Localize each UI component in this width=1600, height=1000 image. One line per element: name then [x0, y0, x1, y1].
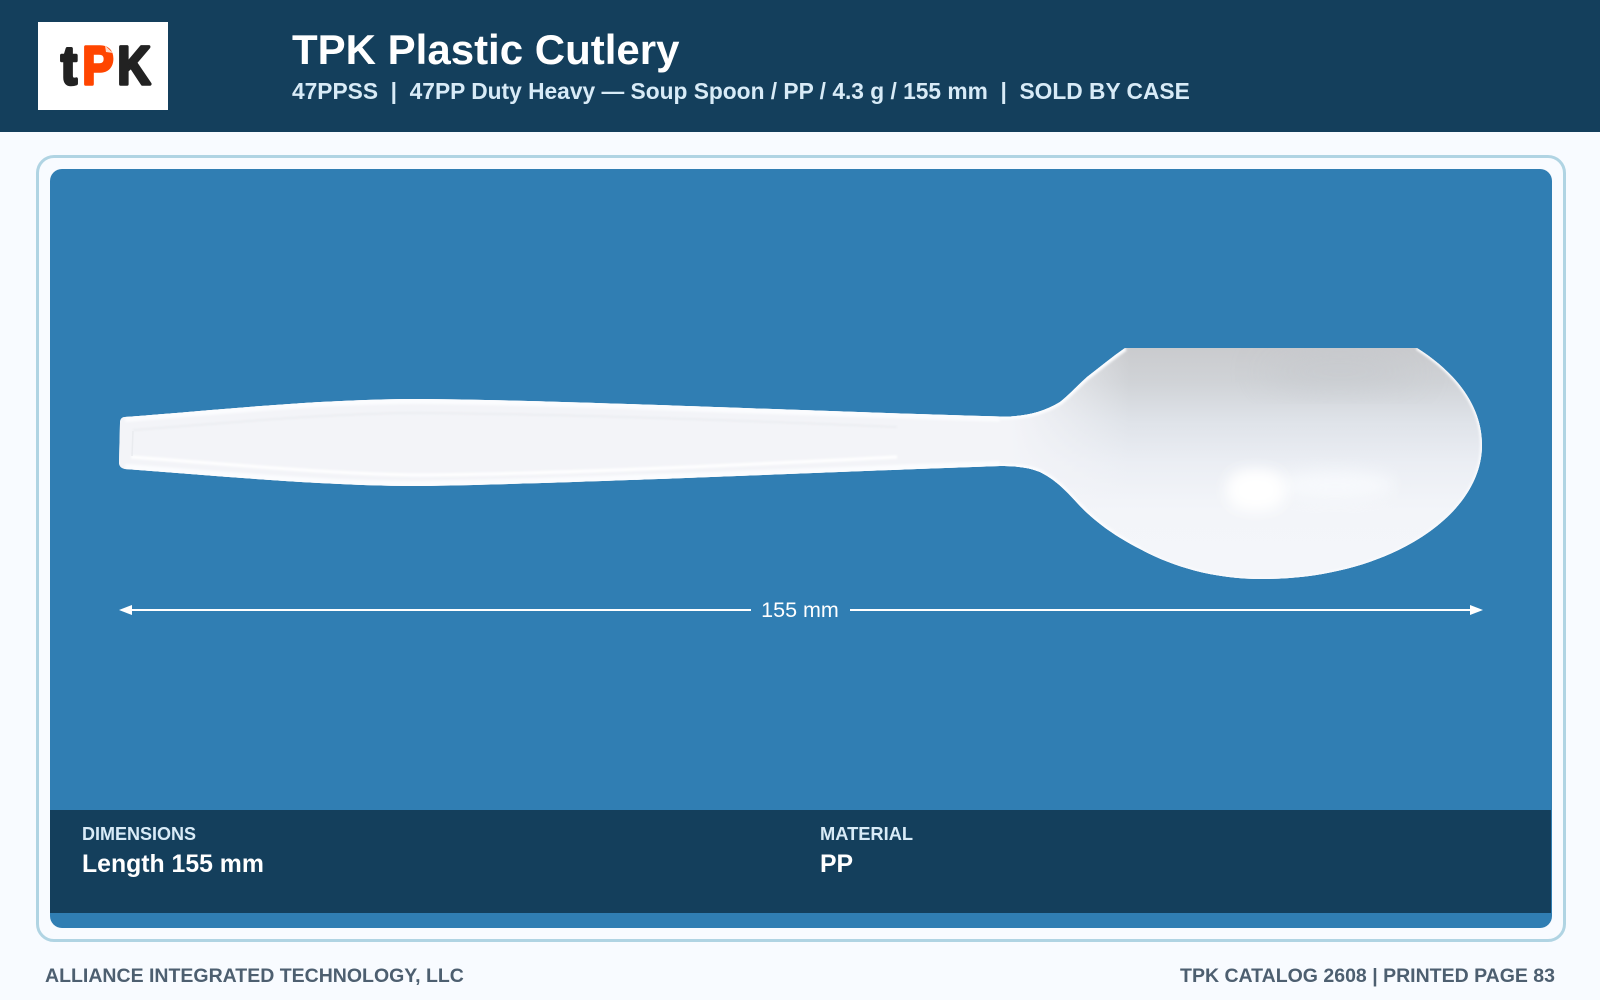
title: TPK Plastic Cutlery	[292, 26, 679, 73]
footer: company: ALLIANCE INTEGRATED TECHNOLOGY, LLC	[45, 965, 464, 987]
panel: product frame	[36, 155, 1566, 942]
dimension arrow: 155 mm: 155 mm	[761, 598, 839, 622]
logo: tPK: K	[118, 36, 150, 96]
label: dimensions: DIMENSIONS	[82, 824, 196, 844]
panel: product image area	[50, 169, 1552, 928]
logo: tPK: t	[61, 36, 77, 96]
label: material: MATERIAL	[820, 823, 913, 844]
logo: tPK: P	[82, 36, 114, 96]
logo: tPK	[38, 22, 168, 110]
spoon illustration	[119, 348, 1483, 617]
dimension arrow: 155 mm	[119, 598, 1483, 622]
header bar	[0, 0, 1600, 132]
footer: catalog: TPK CATALOG 2608 | PRINTED PAGE 83	[1180, 965, 1555, 987]
spec band	[50, 810, 1551, 913]
value: PP: PP	[820, 851, 853, 878]
spec: material	[820, 823, 913, 878]
subtitle: 47PPSS | 47PP Duty Heavy — Soup Spoon / PP / 4.3 g / 155 mm | SOLD BY CASE	[292, 78, 1190, 104]
handle inner ridge lines	[133, 413, 897, 430]
handle face	[119, 399, 1010, 486]
bowl rim	[1140, 348, 1482, 579]
value: length: Length 155 mm	[82, 851, 264, 878]
spoon	[119, 348, 1482, 579]
spec: dimensions	[82, 824, 264, 878]
